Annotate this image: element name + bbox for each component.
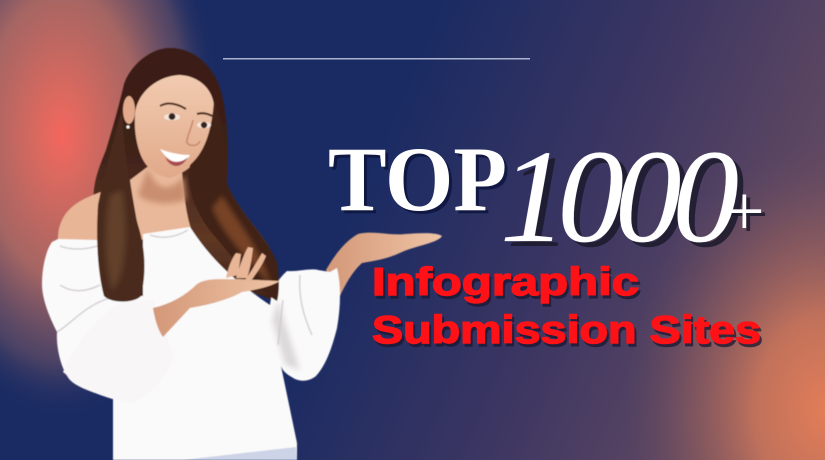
subtitle: Infographic: Infographic [374,264,641,307]
heading: TOP: TOP [328,128,507,230]
woman presenting with open hands [42,48,442,460]
neck shadow [138,168,186,203]
ear [123,96,135,124]
earring [126,125,130,129]
blouse shading [57,230,312,365]
left hair over blouse [97,110,144,302]
subtitle: Submission Sites: Submission Sites [374,312,763,355]
heading: 1000+: 1000 [500,122,738,270]
left hair highlight [106,190,126,290]
right hair highlight [212,195,272,288]
nose [187,120,200,145]
heading: TOP: TOP [331,131,510,233]
face [135,75,214,178]
heading: 1000+: + [724,171,765,251]
shoulder [58,190,106,245]
subtitle: Submission Sites: Submission Sites [372,309,761,352]
left forearm and palm [153,279,280,337]
heading: 1000+: + [728,174,769,254]
left sleeve puff [63,299,174,403]
raised fingers [226,247,266,282]
right hair strand [189,100,279,301]
eyebrows [160,104,186,109]
hair back [94,48,279,303]
eyes [164,113,211,128]
right forearm and hand [326,233,442,296]
subtitle: Infographic: Infographic [372,261,639,304]
neck and chest [130,165,192,240]
smile [160,149,190,162]
heading: 1000+: 1000 [506,127,744,275]
blouse soft shadow [272,300,300,370]
stripe hem [182,447,297,460]
top divider line [223,58,530,60]
blouse body [42,227,340,460]
